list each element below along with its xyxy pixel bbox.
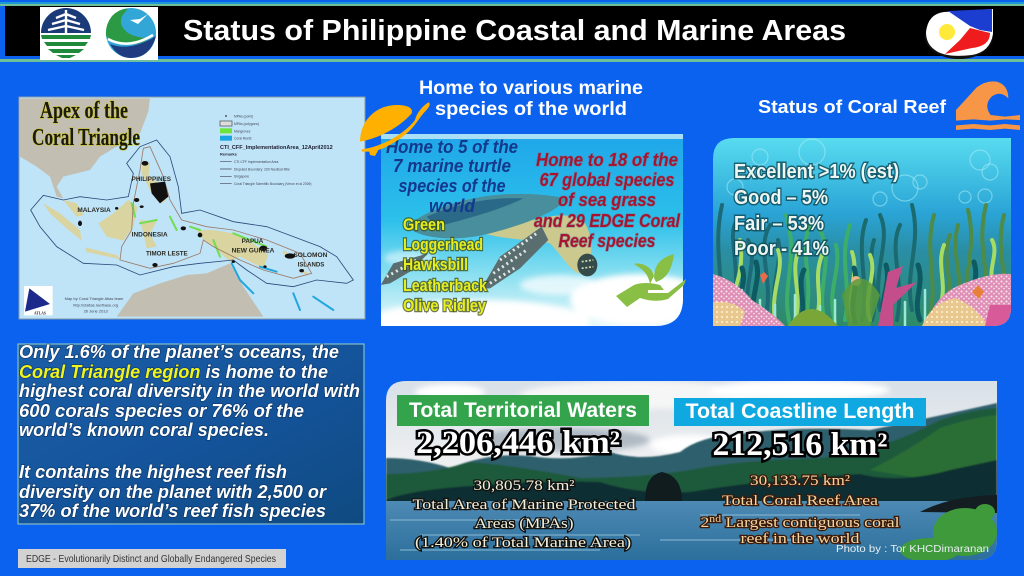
- map: Australia: [117, 263, 263, 317]
- icon: plant in hand: [616, 254, 686, 307]
- panel: coral triangle text: diversity on the planet with 2,500 or: [19, 482, 327, 502]
- water: [386, 501, 997, 560]
- map: credit: 26 June 2013: [84, 309, 109, 314]
- map: legend: Remarks: [220, 152, 238, 157]
- coral reef status list: Fair – 53%: [734, 212, 824, 235]
- map: legend: Disputed Boundary: 200 Nautical Mile: [234, 167, 290, 171]
- panel: coral triangle map: [19, 97, 365, 319]
- map: legend: Coral Reefs: [234, 137, 252, 141]
- title: Status of Philippine Coastal and Marine Areas: [183, 15, 846, 47]
- heading: marine species: species of the world: [435, 99, 627, 120]
- footnote: EDGE: EDGE - Evolutionarily Distinct and Globally Endangered Species: [26, 553, 276, 565]
- sea grass and coral text: Home to 18 of the: [536, 150, 678, 170]
- heading: marine species: Home to various marine: [419, 78, 643, 99]
- map: legend: [220, 114, 333, 186]
- header band: [0, 2, 1024, 62]
- map: country labels: NEW GUINEA: [232, 248, 275, 255]
- text: marine protected areas: [412, 478, 636, 551]
- panel: coral reef: [713, 138, 1011, 326]
- map title: [32, 98, 140, 151]
- coral reef status list: Good – 5%: [734, 186, 828, 209]
- map: coral triangle land: [43, 160, 308, 275]
- map: boundaries: [31, 140, 353, 287]
- turtle head: [577, 254, 597, 276]
- icon: orange wave: [956, 81, 1020, 130]
- turtle species list: [403, 215, 487, 315]
- footnote: EDGE: [18, 549, 286, 568]
- turtle panel text: Home to 5 of the: [386, 137, 518, 157]
- foreground foliage: [900, 504, 997, 562]
- coral reef status list: [734, 160, 899, 260]
- map: legend: CTI-CFF Implementation Area: [234, 160, 279, 164]
- turtle panel text: world: [429, 196, 476, 216]
- panel: coral triangle text: highest coral diversity in the world with: [19, 381, 360, 401]
- text: coral reef area: Largest contiguous coral: [721, 515, 900, 531]
- map: country labels: MALAYSIA: [77, 207, 111, 214]
- distant hills: [386, 402, 997, 479]
- text: marine protected areas: Areas (MPAs): [474, 516, 574, 532]
- icon: DENR logo: [41, 8, 91, 58]
- turtle flippers: [482, 227, 548, 288]
- icon: Philippine flag: [925, 9, 993, 59]
- icon: atlas logo: [24, 286, 53, 316]
- coral reef status list: Poor - 41%: [734, 237, 829, 260]
- text: coral reef area: [700, 473, 900, 547]
- turtle panel text: species of the: [398, 176, 506, 196]
- sea grass and coral text: [534, 150, 681, 251]
- sea grass and coral text: 67 global species: [540, 170, 674, 190]
- number: territorial waters: 2,206,446 km²: [416, 425, 620, 461]
- icon: orange turtle: [360, 102, 430, 156]
- bubbles: [727, 139, 998, 206]
- turtle panel text: 7 marine turtle: [393, 156, 511, 176]
- panel: coral triangle text: Coral Triangle region is home to the: [19, 362, 328, 382]
- turtle species list: Leatherback: [403, 276, 487, 295]
- turtle panel text: [386, 137, 518, 216]
- panel: sea turtle: [381, 134, 683, 326]
- panel: coral triangle text: Only 1.6% of the planet’s oceans, the: [19, 342, 339, 362]
- sea grass and coral text: of sea grass: [558, 190, 656, 210]
- turtle species list: Loggerhead: [403, 235, 483, 254]
- map: legend: MPAs (point): [234, 114, 253, 118]
- map title: Apex of the: [40, 98, 128, 124]
- map: country labels: TIMOR LESTE: [146, 251, 188, 258]
- near hills: [386, 408, 997, 510]
- sea grass and coral text: and 29 EDGE Coral: [534, 211, 681, 231]
- map: credit: Map by Coral Triangle Atlas team: [65, 296, 124, 301]
- map: legend: Mangroves: [234, 129, 251, 133]
- turtle shell: [407, 194, 567, 238]
- label: total coastline length: Total Coastline Length: [686, 400, 914, 423]
- icon: atlas logo: ATLAS: [34, 312, 46, 316]
- map: country labels: INDONESIA: [132, 232, 168, 239]
- text: marine protected areas: Total Area of Marine Protected: [412, 497, 636, 513]
- map: credit: http://ctatlas.reefbase.org: [73, 303, 118, 308]
- panel: coral triangle text: [18, 342, 364, 524]
- heading: marine species: [419, 78, 643, 120]
- map: legend: CTI_CFF_ImplementationArea_12April2012: [220, 145, 333, 151]
- turtle species list: Green: [403, 215, 445, 234]
- panel: coral triangle text: world’s known coral species.: [19, 420, 269, 440]
- logos: [40, 7, 158, 60]
- map: credit: [65, 296, 124, 314]
- shoreline right: [920, 495, 997, 513]
- rock: [645, 472, 682, 501]
- text: marine protected areas: 30,805.78 km²: [474, 478, 575, 494]
- sea grass and coral text: Reef species: [558, 231, 656, 251]
- turtle species list: Olive Ridley: [403, 296, 486, 315]
- text: coral reef area: Total Coral Reef Area: [722, 493, 878, 509]
- map: mangrove and reef colour: [132, 203, 333, 310]
- map: country labels: PHILIPPINES: [132, 176, 172, 183]
- seaweed: [718, 205, 1004, 326]
- map: protected area markers: [78, 161, 304, 272]
- map: country labels: SOLOMON: [293, 252, 328, 259]
- text: coral reef area: nd: [709, 514, 721, 525]
- map: country labels: ISLANDS: [298, 261, 325, 268]
- map: country labels: PAPUA: [242, 238, 264, 245]
- label: total territorial waters: Total Territorial Waters: [409, 399, 637, 422]
- map: legend: Singapore: [234, 175, 249, 179]
- label: total territorial waters: [397, 395, 649, 426]
- text: coral reef area: 2: [700, 515, 708, 531]
- map: legend: Coral Triangle Scientific Boundary (Veron et al 2009): [234, 182, 312, 186]
- heading: coral reef status: Status of Coral Reef: [758, 97, 947, 117]
- icon: BMB logo: [106, 8, 156, 58]
- panel: coral triangle text: 37% of the world’s reef fish species: [19, 501, 326, 521]
- hills: [386, 403, 997, 510]
- turtle species list: Hawksbill: [403, 255, 468, 274]
- map title: Coral Triangle: [32, 125, 140, 151]
- panel: coral triangle text: 600 corals species or 76% of the: [19, 401, 304, 421]
- coral reef status list: Excellent >1% (est): [734, 160, 899, 183]
- map: mainland Asia: [20, 98, 150, 198]
- panel: coral triangle text: It contains the highest reef fish: [19, 462, 287, 482]
- panel: territorial waters photo: [386, 380, 997, 562]
- text: coral reef area: reef in the world: [740, 531, 860, 547]
- map: legend: MPAs (polygons): [234, 122, 259, 126]
- turtle body: [483, 215, 591, 274]
- photo credit: Photo by : Tor KHCDimaranan: [836, 544, 989, 555]
- text: coral reef area: 30,133.75 km²: [750, 473, 851, 489]
- number: coastline length: 212,516 km²: [712, 427, 888, 463]
- text: marine protected areas: (1.40% of Total Marine Area): [415, 535, 631, 551]
- map: country labels: [77, 176, 328, 268]
- corals: [713, 266, 1011, 326]
